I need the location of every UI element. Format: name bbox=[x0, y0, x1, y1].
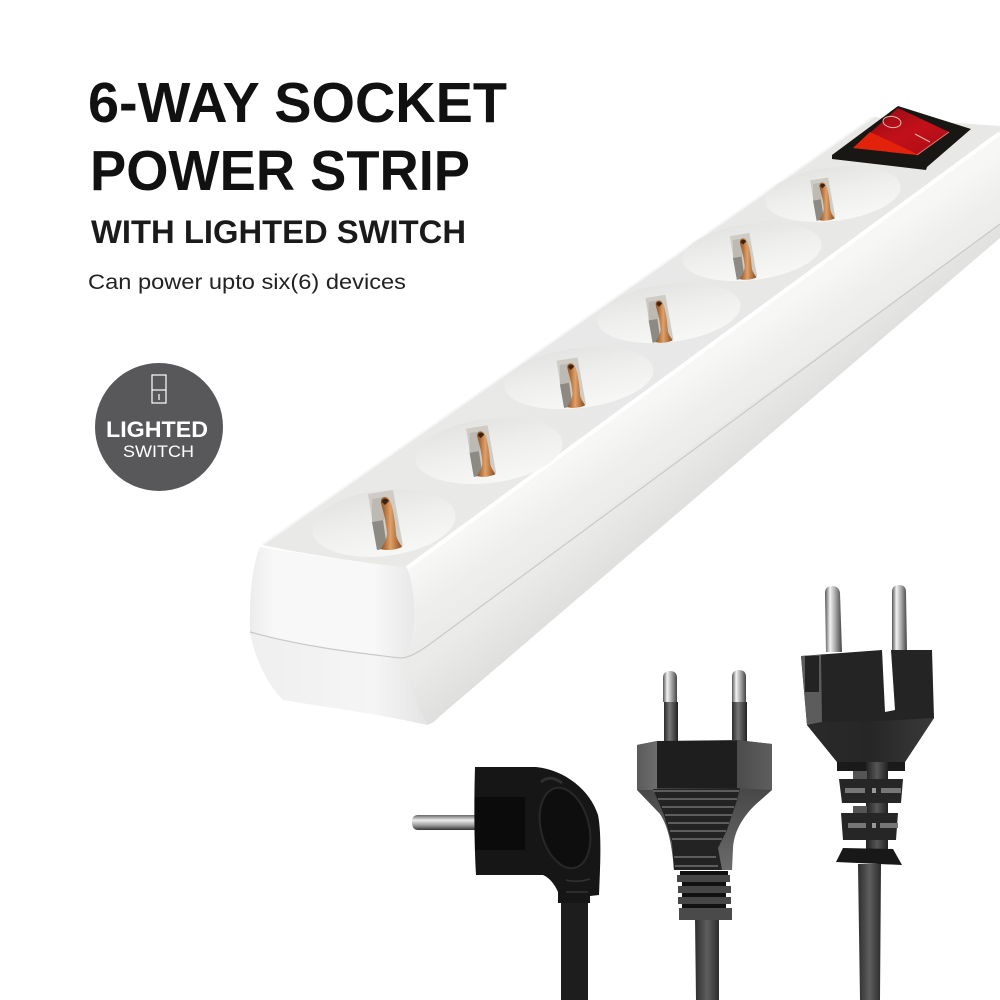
rocker switch bbox=[832, 106, 971, 170]
description: Can power upto six(6) devices bbox=[88, 271, 406, 294]
badge: lighted switch bbox=[95, 363, 223, 491]
badge text: SWITCH bbox=[123, 443, 194, 461]
strip lower side bbox=[400, 222, 1000, 725]
strain relief bbox=[677, 871, 732, 920]
plug: angled bbox=[412, 767, 600, 1000]
metal pin bbox=[412, 815, 475, 830]
icon: switch bbox=[152, 375, 166, 403]
plug: two pin bbox=[637, 670, 772, 1000]
socket 5 bbox=[679, 216, 825, 288]
cable bbox=[695, 918, 719, 1000]
pins bbox=[664, 702, 678, 742]
badge text bbox=[106, 417, 208, 461]
title bbox=[88, 71, 507, 203]
socket 6 bbox=[762, 159, 904, 229]
title: POWER STRIP bbox=[90, 139, 470, 203]
ribbed grip bbox=[653, 788, 740, 870]
socket 2 bbox=[412, 410, 566, 492]
cable bbox=[858, 864, 881, 1000]
socket 1 bbox=[309, 481, 459, 565]
head bbox=[801, 650, 934, 762]
title: 6-WAY SOCKET bbox=[88, 71, 507, 135]
subtitle: WITH LIGHTED SWITCH bbox=[91, 214, 466, 250]
power strip bbox=[250, 106, 1000, 725]
collar and ribs bbox=[836, 762, 905, 865]
socket 3 bbox=[501, 339, 657, 417]
pins bbox=[825, 586, 842, 652]
strip front upper face bbox=[250, 547, 414, 658]
socket 4 bbox=[594, 275, 744, 351]
plug: earthed straight bbox=[801, 585, 934, 1000]
badge text: LIGHTED bbox=[106, 417, 208, 442]
strip front lower face bbox=[250, 632, 427, 725]
head silhouette bbox=[637, 740, 772, 870]
strip upper side bbox=[400, 133, 1000, 658]
strip top face bbox=[262, 117, 1000, 568]
head facets bbox=[637, 741, 657, 790]
